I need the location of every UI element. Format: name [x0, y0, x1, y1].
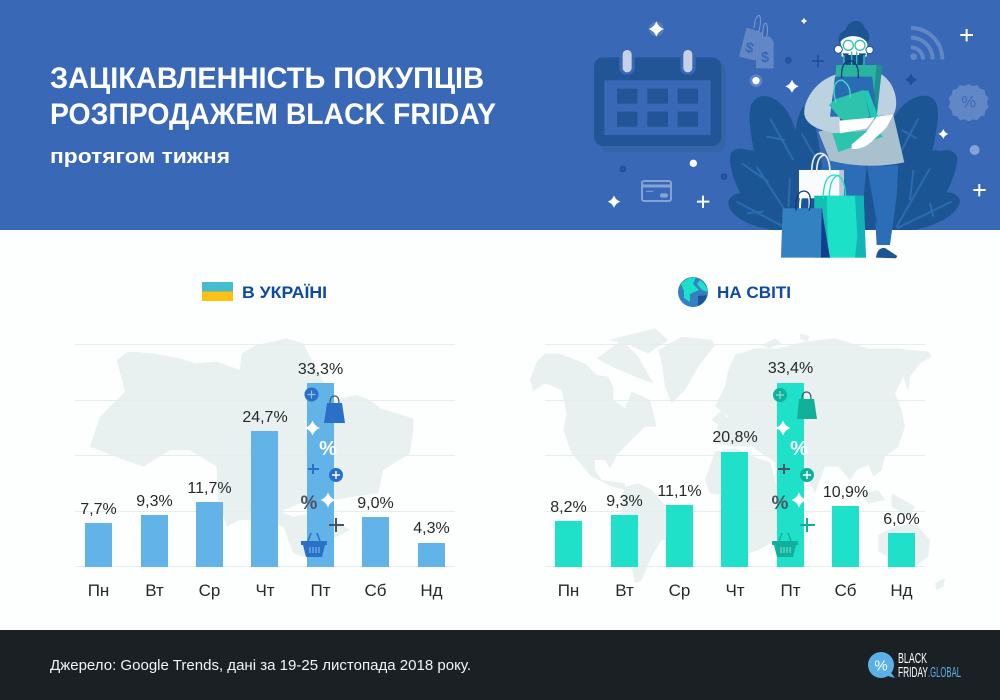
title: ЗАЦІКАВЛЕННІСТЬ ПОКУПЦІВ — [50, 62, 484, 95]
icon: price tags: $ — [744, 40, 755, 57]
header illustration — [594, 15, 989, 258]
logo — [868, 650, 961, 681]
legs — [820, 160, 898, 258]
panel: world — [527, 277, 945, 600]
bar decorations: Ukraine: % — [319, 438, 337, 460]
header band — [0, 0, 1000, 230]
bar decorations: world: % — [772, 493, 789, 514]
bar chart: world: 20,8% — [712, 429, 758, 446]
logo: FRIDAY — [898, 664, 928, 681]
carried bags — [829, 61, 883, 152]
bar chart: world: Нд — [890, 581, 913, 600]
bar chart: world: Сб — [834, 581, 857, 600]
bar chart: Ukraine: 9,3% — [136, 493, 173, 510]
bar decorations: Ukraine — [301, 388, 345, 557]
bar decorations: world — [772, 388, 817, 557]
bar chart: world: Чт — [725, 581, 745, 600]
logo: .GLOBAL — [928, 664, 961, 681]
bar chart: world: 10,9% — [823, 484, 868, 501]
bar chart: Ukraine — [80, 361, 450, 600]
bar decorations: Ukraine: % — [301, 493, 318, 514]
bar chart: Ukraine: 33,3% — [298, 361, 343, 378]
title — [50, 62, 496, 131]
panel: Ukraine — [75, 282, 455, 600]
map of Ukraine — [90, 338, 413, 557]
person with bags and leaves — [728, 21, 960, 258]
bar chart: world: 9,3% — [606, 493, 643, 510]
title: РОЗПРОДАЖЕМ BLACK FRIDAY — [50, 98, 496, 131]
bar chart: Ukraine: 9,0% — [357, 495, 394, 512]
bar chart: Ukraine: 7,7% — [80, 501, 117, 518]
heading: На світі — [678, 277, 791, 307]
heading: В Україні: В УКРАЇНІ — [242, 283, 327, 302]
bar chart: Ukraine: Вт — [145, 581, 164, 600]
logo: % — [874, 658, 888, 674]
bar chart: world: Пт — [780, 581, 801, 600]
source note: Джерело: Google Trends, дані за 19-25 листопада 2018 року. — [50, 657, 471, 674]
bar chart: world: 8,2% — [550, 499, 587, 516]
bar chart: world: 6,0% — [883, 511, 920, 528]
icon: wifi — [911, 28, 942, 59]
bar chart: world: 33,4% — [768, 360, 813, 377]
logo: BLACK — [898, 650, 927, 667]
world map — [527, 328, 945, 590]
head — [834, 21, 873, 67]
heading: На світі: НА СВІТІ — [717, 283, 791, 302]
plus marks — [697, 29, 986, 208]
sparkles — [608, 18, 948, 208]
subtitle: протягом тижня — [50, 146, 230, 168]
icon: price tags — [739, 15, 774, 68]
bar chart: Ukraine: Ср — [199, 581, 220, 600]
leaf veins — [737, 118, 952, 228]
sweater — [804, 73, 904, 166]
bar chart: Ukraine: 24,7% — [242, 409, 288, 426]
bar decorations: world: % — [790, 438, 808, 460]
bar chart: Ukraine: Пн — [88, 581, 109, 600]
bar chart: Ukraine: Пт — [310, 581, 331, 600]
leaves — [728, 96, 960, 230]
bar chart: world: Вт — [615, 581, 634, 600]
bar chart: Ukraine: Чт — [255, 581, 275, 600]
icon: percent badge — [949, 84, 989, 121]
icon: calendar — [594, 47, 726, 152]
heading: В Україні — [202, 282, 327, 302]
Americas — [527, 328, 730, 583]
icon: credit card — [642, 181, 671, 201]
bar chart: Ukraine: Сб — [364, 581, 387, 600]
shopping bags — [781, 153, 866, 258]
bar chart: world: Ср — [669, 581, 690, 600]
shirt and hand — [839, 115, 893, 149]
grid lines — [75, 344, 455, 566]
bar chart: world: Пн — [558, 581, 579, 600]
bar chart: Ukraine: 4,3% — [413, 520, 450, 537]
footer band — [0, 630, 1000, 700]
Eurasia, Africa, Australia — [705, 333, 945, 590]
small dots and marks — [621, 55, 980, 179]
icon: price tags: $ — [761, 50, 769, 66]
bar chart: Ukraine: 11,7% — [187, 480, 232, 497]
grid lines — [545, 344, 925, 566]
icon: percent badge: % — [961, 92, 976, 111]
bar chart: world: 11,1% — [657, 483, 702, 500]
bar chart: world — [550, 360, 920, 600]
bar chart: Ukraine: Нд — [420, 581, 443, 600]
